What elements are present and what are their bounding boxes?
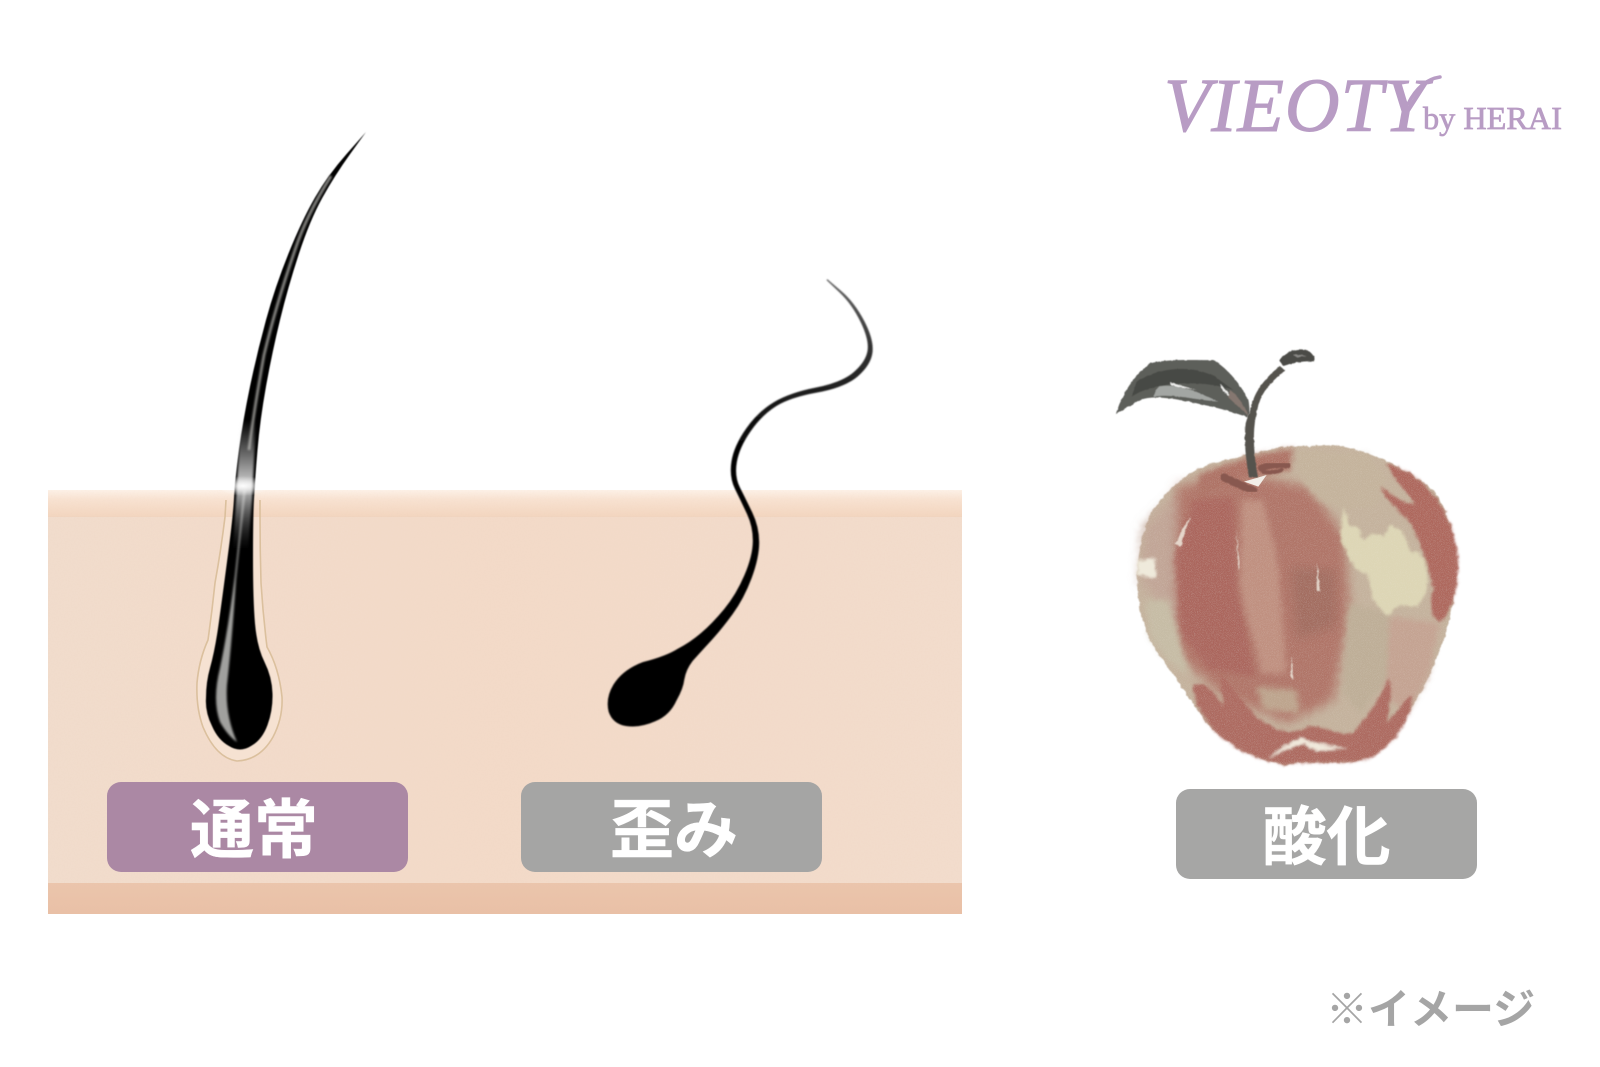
leaf bbox=[1116, 360, 1249, 417]
logo: by HERAI bbox=[1423, 100, 1562, 136]
badge: distortion: 歪み bbox=[610, 794, 738, 866]
illustration: distorted hair bbox=[608, 280, 872, 726]
hair shaft and bulb bbox=[206, 132, 366, 750]
lower khaki bbox=[1257, 687, 1300, 713]
lower-right wash bbox=[1383, 617, 1440, 713]
logo bbox=[1164, 64, 1562, 148]
skin grain bbox=[48, 490, 962, 914]
left lower khaki bbox=[1145, 600, 1190, 677]
top rim bbox=[1197, 448, 1293, 497]
left red stripe bbox=[1175, 497, 1255, 677]
left cream notch bbox=[1137, 558, 1157, 578]
bottom highlight bbox=[1268, 737, 1348, 758]
calyx bbox=[1224, 464, 1287, 491]
hair highlight upper bbox=[249, 176, 331, 450]
badge: oxidation bbox=[1176, 789, 1477, 879]
skin lower band bbox=[48, 883, 962, 914]
upper khaki bbox=[1297, 450, 1387, 510]
badge: distortion bbox=[521, 782, 822, 872]
illustration: normal hair bbox=[197, 132, 366, 761]
broad red wash bbox=[1140, 473, 1350, 723]
hair highlight lower bbox=[216, 490, 246, 742]
apple body bbox=[1137, 445, 1458, 765]
badge: oxidation: 酸化 bbox=[1262, 802, 1390, 874]
skin surface band bbox=[48, 490, 962, 517]
bottom red strokes bbox=[1193, 673, 1412, 765]
right red rim bbox=[1380, 463, 1458, 622]
centre pale stripe bbox=[1240, 500, 1287, 673]
badge: normal: 通常 bbox=[190, 794, 318, 866]
watercolor white streaks bbox=[1175, 517, 1320, 680]
skin main layer bbox=[48, 517, 962, 883]
calyx highlight bbox=[1244, 475, 1267, 487]
image note: ※イメージ bbox=[1326, 986, 1535, 1033]
stem bbox=[1245, 349, 1315, 477]
hair follicle outline bbox=[197, 500, 282, 761]
follicle interior bbox=[197, 517, 282, 761]
bud bbox=[1279, 349, 1315, 366]
cream highlight bbox=[1340, 507, 1428, 617]
panel: skin cross-section bbox=[48, 490, 962, 914]
illustration: oxidised apple bbox=[1116, 349, 1458, 765]
logo: VIEOTY bbox=[1164, 64, 1434, 148]
surface shine bbox=[217, 476, 269, 496]
badge: normal bbox=[107, 782, 408, 872]
hair glow at skin surface bbox=[233, 420, 256, 550]
